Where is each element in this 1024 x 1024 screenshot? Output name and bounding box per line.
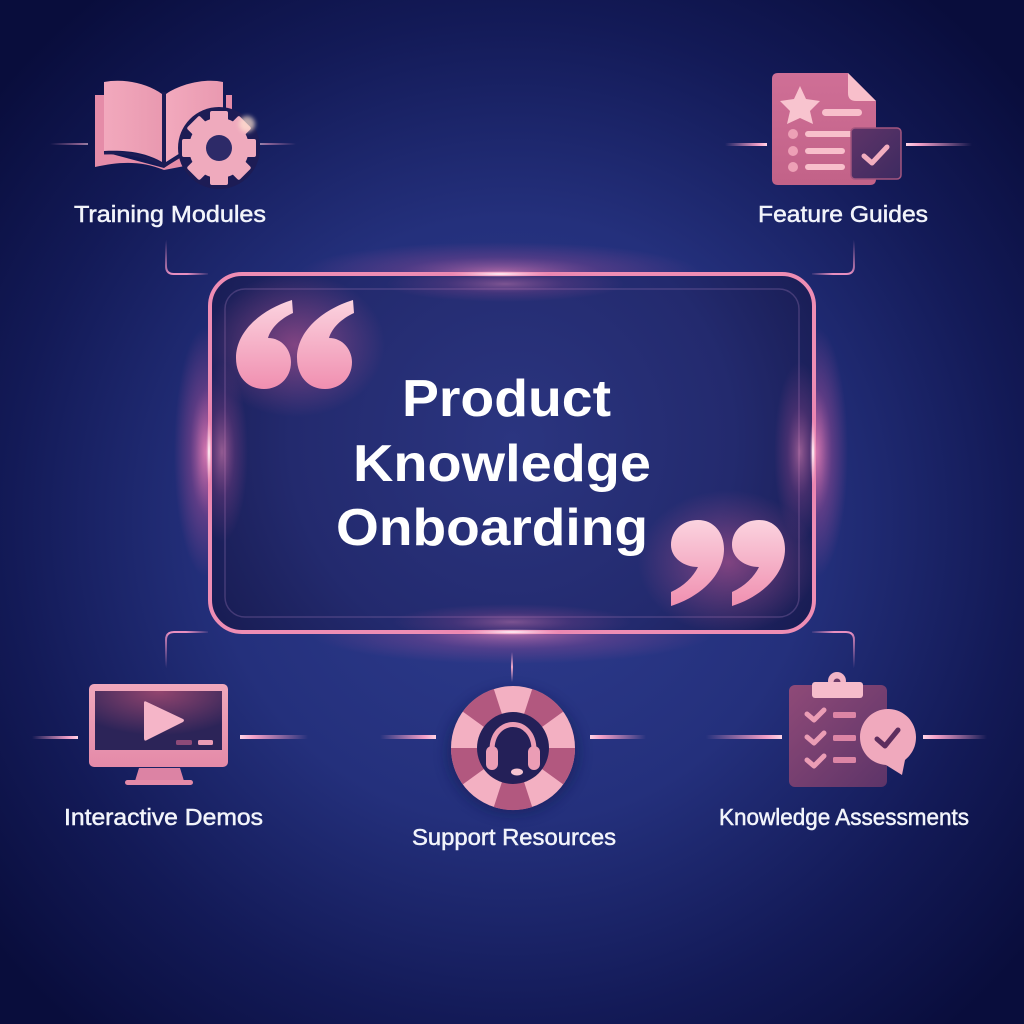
icon: opening quote bbox=[205, 273, 385, 417]
label: Training Modules: Training Modules bbox=[74, 201, 266, 227]
label: Support Resources: Support Resources bbox=[412, 824, 616, 850]
panel: central card bbox=[174, 242, 848, 664]
icon: clipboard with speech bubble bbox=[789, 672, 916, 787]
label: Interactive Demos: Interactive Demos bbox=[64, 804, 263, 830]
gear bbox=[182, 111, 256, 185]
icon: monitor with play button bbox=[89, 684, 228, 785]
icon: closing quote bbox=[638, 490, 818, 634]
side glints bbox=[32, 143, 987, 739]
headset bbox=[486, 724, 540, 776]
highlights bbox=[206, 271, 816, 635]
card outer glows bbox=[174, 242, 848, 664]
title: Onboarding bbox=[336, 499, 648, 557]
card frame bbox=[210, 274, 814, 632]
inner line bbox=[225, 289, 799, 617]
icon: feature guide document bbox=[772, 73, 901, 185]
title: Product bbox=[402, 370, 611, 428]
icon: support lifebuoy with headset bbox=[447, 686, 579, 814]
connector lines bbox=[166, 240, 854, 682]
label: Feature Guides: Feature Guides bbox=[758, 201, 928, 227]
inner glows bbox=[196, 266, 826, 640]
label: Knowledge Assessments: Knowledge Assessments bbox=[719, 804, 969, 830]
title bbox=[336, 370, 651, 557]
icon: book and gear bbox=[95, 81, 260, 189]
title: Knowledge bbox=[353, 435, 651, 493]
